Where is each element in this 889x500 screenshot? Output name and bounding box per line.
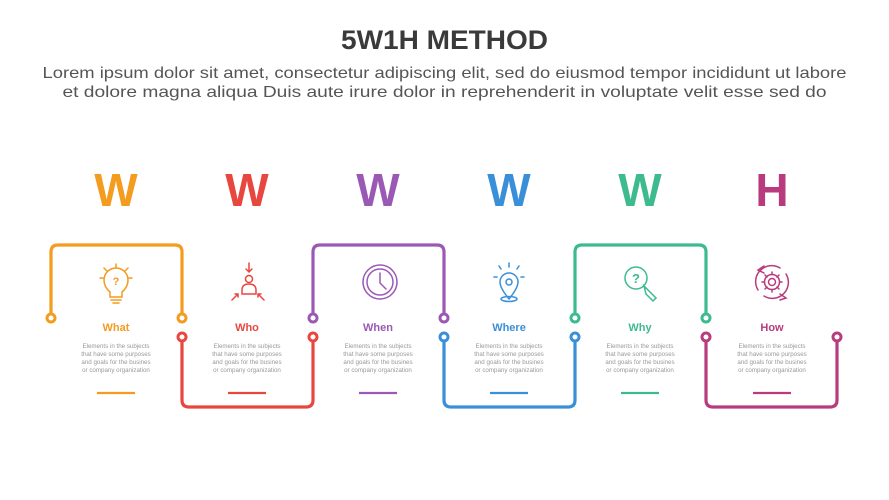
labels: How (760, 322, 784, 334)
descriptions: or company organization (738, 367, 806, 374)
descriptions: or company organization (344, 367, 412, 374)
descriptions: Elements in the subjects (82, 343, 150, 350)
descriptions: that have some purposes (737, 351, 807, 358)
icon: magnifier with question: ? (632, 271, 640, 286)
letters: W (225, 164, 269, 216)
descriptions: and goals for the busines (474, 359, 544, 366)
labels: When (363, 322, 393, 334)
descriptions: Elements in the subjects (344, 343, 412, 350)
descriptions: that have some purposes (212, 351, 282, 358)
icon: location pin (494, 263, 524, 302)
letters: W (94, 164, 138, 216)
descriptions: that have some purposes (343, 351, 413, 358)
underlines (97, 392, 791, 394)
labels (103, 322, 784, 334)
labels: What (103, 322, 130, 334)
descriptions: that have some purposes (81, 351, 151, 358)
descriptions: that have some purposes (474, 351, 544, 358)
descriptions: or company organization (606, 367, 674, 374)
descriptions: and goals for the busines (212, 359, 282, 366)
title: 5W1H METHOD (341, 25, 548, 55)
icon: clock (363, 265, 397, 299)
letters (94, 164, 789, 216)
endpoint circles (47, 314, 841, 341)
descriptions (81, 343, 807, 374)
labels: Where (492, 322, 526, 334)
subtitle: et dolore magna aliqua Duis aute irure dolor in reprehenderit in voluptate velit esse sed do (62, 84, 827, 101)
descriptions: Elements in the subjects (475, 343, 543, 350)
descriptions: or company organization (82, 367, 150, 374)
icon: gear cycle (756, 266, 788, 300)
icon: lightbulb (100, 264, 132, 303)
labels: Why (628, 322, 652, 334)
icon: lightbulb: ? (113, 276, 120, 288)
descriptions: and goals for the busines (605, 359, 675, 366)
letters: W (618, 164, 662, 216)
descriptions: and goals for the busines (343, 359, 413, 366)
brackets (51, 245, 837, 407)
descriptions: Elements in the subjects (606, 343, 674, 350)
descriptions: and goals for the busines (737, 359, 807, 366)
icon: person with arrows (232, 263, 264, 300)
letters: W (356, 164, 400, 216)
subtitle (42, 65, 847, 101)
descriptions: that have some purposes (605, 351, 675, 358)
labels: Who (235, 322, 259, 334)
descriptions: or company organization (475, 367, 543, 374)
icon: magnifier with question (625, 267, 656, 301)
letters: W (487, 164, 531, 216)
descriptions: Elements in the subjects (738, 343, 806, 350)
descriptions: Elements in the subjects (213, 343, 281, 350)
descriptions: or company organization (213, 367, 281, 374)
letters: H (755, 164, 789, 216)
subtitle: Lorem ipsum dolor sit amet, consectetur adipiscing elit, sed do eiusmod tempor incididunt ut labore (42, 65, 847, 82)
descriptions: and goals for the busines (81, 359, 151, 366)
